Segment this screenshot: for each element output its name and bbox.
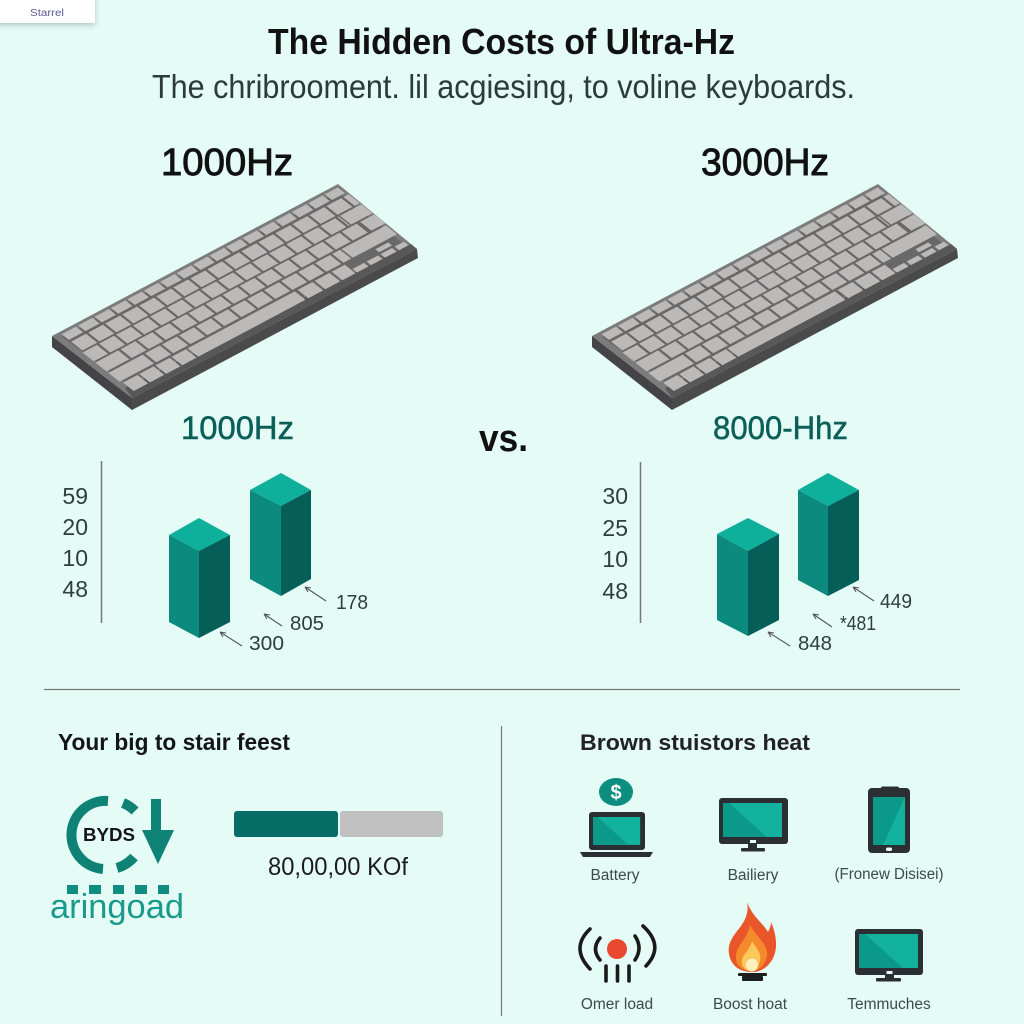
versus label: vs. (479, 418, 528, 460)
icon: flame (729, 902, 776, 981)
icon: download ring logo (50, 799, 184, 926)
icon: monitor (855, 929, 923, 982)
bar chart: left: 178 (336, 592, 368, 614)
icon: signal load (580, 926, 655, 981)
label: (Fronew Disisei) (834, 866, 944, 883)
axis values: 10 (62, 545, 88, 571)
icon: laptop with dollar: $ (610, 782, 622, 804)
icon: download ring logo: aringoad (50, 888, 184, 926)
label: Battery (590, 867, 640, 884)
keyboard: left (52, 184, 418, 410)
title: The Hidden Costs of Ultra-Hz (268, 21, 735, 62)
heading: left keyboard: 1000Hz (161, 142, 293, 184)
label: Omer load (581, 996, 653, 1013)
icon: monitor (719, 798, 788, 852)
callouts (220, 587, 326, 646)
label: Temmuches (847, 996, 931, 1013)
axis values: 48 (602, 578, 628, 604)
progress bar (234, 811, 443, 881)
corner tab: Starrel (30, 8, 64, 19)
bar 2 (250, 473, 311, 596)
heading: bottom right: Brown stuistors heat (580, 730, 811, 755)
bar chart: left: 300 (249, 633, 284, 655)
bar chart: right: 449 (880, 591, 912, 613)
progress bar: 80,00,00 KOf (268, 853, 408, 881)
bar 2 (798, 473, 859, 596)
label: Bailiery (728, 867, 779, 884)
icon: download ring logo: BYDS (83, 825, 135, 845)
axis values (62, 483, 88, 602)
axis values: 48 (62, 576, 88, 602)
bar chart: right: *481 (840, 613, 876, 635)
bar chart: right: 848 (798, 633, 832, 655)
icon: tablet (868, 786, 910, 853)
subheading: right chart: 8000-Hhz (713, 410, 848, 446)
vertical divider (500, 726, 502, 1016)
keyboard: right (592, 184, 958, 410)
heading: right keyboard: 3000Hz (701, 142, 829, 184)
bar chart: left (62, 461, 368, 655)
axis values: 25 (602, 515, 628, 541)
horizontal divider (44, 688, 960, 690)
callouts (768, 587, 874, 646)
bar chart: left: 805 (290, 613, 324, 635)
subtitle: The chribrooment. lil acgiesing, to voline keyboards. (152, 68, 855, 105)
axis values: 30 (602, 483, 628, 509)
heading: bottom left: Your big to stair feest (58, 729, 290, 755)
label: Boost hoat (713, 996, 788, 1013)
bar chart: right (602, 462, 912, 655)
bar 1 (717, 518, 779, 636)
axis values: 59 (62, 483, 88, 509)
subheading: left chart: 1000Hz (181, 410, 294, 446)
icon: laptop with dollar (580, 778, 653, 857)
axis values: 10 (602, 546, 628, 572)
bar 1 (169, 518, 230, 638)
corner tab (0, 0, 95, 23)
axis values: 20 (62, 514, 88, 540)
axis values (602, 483, 628, 604)
